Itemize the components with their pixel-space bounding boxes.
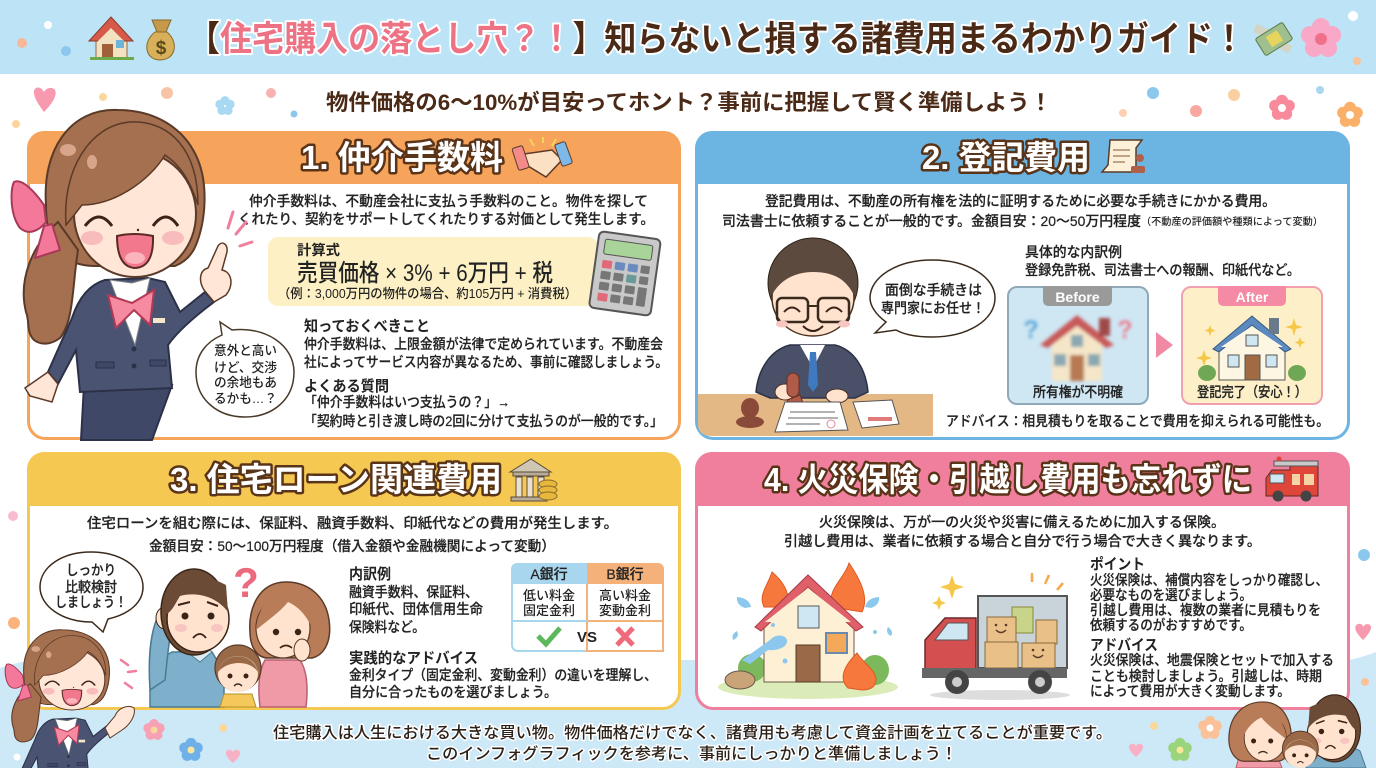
intro text (722, 193, 1323, 229)
intro text: 金額目安：50〜100万円程度（借入金額や金融機関によって変動） (149, 538, 555, 554)
text: breakdown: 具体的な内訳例 (1025, 244, 1122, 260)
text: advice: によって費用が大きく変動します。 (1090, 683, 1290, 699)
heading: 4. 火災保険・引越し費用も忘れずに (764, 461, 1252, 498)
speech bubble: けど、交渉 (214, 360, 277, 375)
text: breakdown (1025, 244, 1300, 278)
intro text: （不動産の評価額や種類によって変動） (1141, 215, 1323, 228)
text: よくある質問 (304, 378, 663, 429)
text: 知っておくべきこと: 知っておくべきこと (304, 317, 430, 335)
text: practical advice (349, 649, 657, 700)
icon: money bag: $ (156, 38, 167, 59)
icon: blurred house: ? (1117, 316, 1133, 344)
text: breakdown: 登録免許税、司法書士への報酬、印紙代など。 (1025, 262, 1300, 278)
illustration: burning house with hose (718, 563, 898, 699)
text: point: 引越し費用は、複数の業者に見積もりを (1090, 602, 1321, 618)
speech bubble: るかも…？ (214, 391, 277, 406)
stamp and documents (736, 373, 899, 432)
before card (1008, 286, 1148, 404)
intro text: くれたり、契約をサポートしてくれたりする対価として発生します。 (238, 211, 654, 227)
speech bubble: compare (40, 552, 143, 632)
speech bubble: 専門家にお任せ！ (881, 300, 985, 316)
intro text (87, 515, 618, 554)
icon: flying money (1255, 22, 1293, 56)
text: point (1090, 556, 1328, 633)
bank comparison table: B銀行 (606, 566, 644, 582)
character: family at bottom right (1229, 695, 1366, 768)
icon: scroll and stamp (1102, 140, 1145, 173)
speech bubble: compare: 比較検討 (65, 579, 117, 595)
intro text: 登記費用は、不動産の所有権を法的に証明するために必要な手続きにかかる費用。 (765, 193, 1276, 209)
text: 知っておくべきこと (304, 317, 668, 370)
icon: fire engine (1266, 456, 1318, 502)
illustration: moving truck (922, 573, 1070, 700)
speech bubble: compare: しましょう！ (55, 594, 127, 610)
character: small businesswoman waving (5, 630, 136, 768)
formula callout: （例：3,000万円の物件の場合、約105万円 + 消費税） (278, 286, 577, 301)
intro text: 引越し費用は、業者に依頼する場合と自分で行う場合で大きく異なります。 (784, 533, 1261, 549)
speech bubble (870, 260, 995, 337)
text: practical advice: 自分に合ったものを選びましょう。 (349, 684, 557, 700)
text: breakdown (349, 566, 483, 635)
bank comparison table (511, 563, 664, 651)
subtitle: 物件価格の6〜10%が目安ってホント？事前に把握して賢く準備しよう！ (326, 90, 1052, 115)
icon: cherry blossom (1301, 18, 1341, 57)
icon: cross (617, 628, 633, 645)
text: advice: 火災保険は、地震保険とセットで加入する (1090, 652, 1334, 668)
formula callout (268, 237, 598, 306)
speech bubble: の余地もあ (214, 375, 277, 390)
desk (698, 394, 933, 436)
icon: money bag (147, 20, 174, 60)
text: breakdown: 内訳例 (349, 566, 391, 583)
bank comparison table: 固定金利 (523, 603, 575, 618)
after card: After (1236, 289, 1269, 305)
character: judicial scrivener (756, 238, 868, 403)
text: breakdown: 印紙代、団体信用生命 (349, 601, 483, 617)
icon: house emoji (89, 17, 134, 60)
bank comparison table: 低い料金 (523, 588, 575, 603)
text: 知っておくべきこと: 仲介手数料は、上限金額が法律で定められています。不動産会 (304, 336, 663, 352)
character: worried family (149, 559, 330, 707)
intro text (784, 514, 1261, 549)
text: practical advice: 金利タイプ（固定金利、変動金利）の違いを理解し、 (349, 667, 657, 683)
speech bubble: 面倒な手続きは (885, 282, 982, 298)
speech bubble: compare: しっかり (66, 562, 116, 578)
formula callout: 計算式 (297, 242, 340, 258)
intro text: 司法書士に依頼することが一般的です。金額目安：20〜50万円程度 (722, 213, 1141, 229)
intro text (238, 193, 654, 227)
icon: bank and coins (510, 459, 557, 501)
text: advice: ことも検討しましょう。引越しは、時期 (1090, 668, 1322, 684)
text: breakdown: 保険料など。 (349, 619, 425, 635)
footer message (273, 723, 1112, 763)
character: businesswoman pointing (12, 110, 252, 440)
heading: 3. 住宅ローン関連費用 (170, 461, 502, 498)
panel 3: 住宅ローン関連費用 (27, 452, 681, 708)
text: 知っておくべきこと: 社によってサービス内容が異なるため、事前に確認しましょう。 (304, 354, 668, 370)
speech bubble: 意外と高い (214, 343, 277, 358)
icon: calculator (589, 231, 661, 316)
intro text: 火災保険は、万が一の火災や災害に備えるために加入する保険。 (819, 514, 1225, 530)
icon: blurred house: ? (1023, 316, 1039, 344)
footer message: 住宅購入は人生における大きな買い物。物件価格だけでなく、諸費用も考慮して資金計画を立てることが重要です。 (273, 723, 1112, 742)
character: worried family: ? (233, 559, 259, 606)
heading: 2. 登記費用 (922, 139, 1090, 176)
text: よくある質問: 「契約時と引き渡し時の2回に分けて支払うのが一般的です。」 (304, 413, 663, 429)
advice text: アドバイス：相見積もりを取ることで費用を抑えられる可能性も。 (946, 413, 1329, 429)
panel 4: 火災保険・引越し費用 (695, 452, 1350, 708)
icon: clear house (1196, 316, 1306, 381)
formula callout: 売買価格 × 3% + 6万円 + 税 (297, 260, 553, 287)
icon: check (538, 628, 560, 644)
footer message: このインフォグラフィックを参考に、事前にしっかりと準備しましょう！ (426, 745, 957, 763)
text: breakdown: 融資手数料、保証料、 (349, 584, 478, 600)
text: advice (1090, 637, 1334, 699)
before card: 所有権が不明確 (1033, 384, 1123, 400)
intro text: 住宅ローンを組む際には、保証料、融資手数料、印紙代などの費用が発生します。 (87, 515, 618, 531)
after card: 登記完了（安心！） (1197, 384, 1307, 400)
panel 2: 登記費用 (695, 131, 1350, 438)
title: 【住宅購入の落とし穴？！】知らないと損する諸費用まるわかりガイド！ (188, 20, 1245, 59)
text: point: 必要なものを選びましょう。 (1090, 587, 1252, 603)
text: point: 火災保険は、補償内容をしっかり確認し、 (1090, 572, 1328, 588)
text: point: 依頼するのがおすすめです。 (1090, 617, 1252, 633)
after card (1182, 286, 1322, 404)
text: よくある質問: 「仲介手数料はいつ支払うの？」→ (304, 394, 510, 410)
bank comparison table: VS (577, 629, 597, 646)
top header band (0, 0, 1376, 74)
speech bubble (196, 322, 294, 417)
text: advice: アドバイス (1090, 637, 1158, 654)
text: よくある質問: よくある質問 (304, 378, 389, 395)
before card: Before (1055, 289, 1100, 305)
bank comparison table: A銀行 (530, 566, 568, 582)
heading: 1. 仲介手数料 (301, 139, 503, 176)
bank comparison table: 高い料金 (599, 588, 651, 603)
intro text: 仲介手数料は、不動産会社に支払う手数料のこと。物件を探して (249, 193, 648, 209)
panel 1: 仲介手数料 (12, 110, 681, 440)
text: point: ポイント (1090, 556, 1145, 573)
icon: handshake (512, 137, 573, 177)
text: practical advice: 実践的なアドバイス (349, 649, 478, 667)
bank comparison table: 変動金利 (599, 603, 651, 618)
arrow: before to after (1156, 332, 1173, 358)
icon: blurred house (1023, 315, 1133, 381)
